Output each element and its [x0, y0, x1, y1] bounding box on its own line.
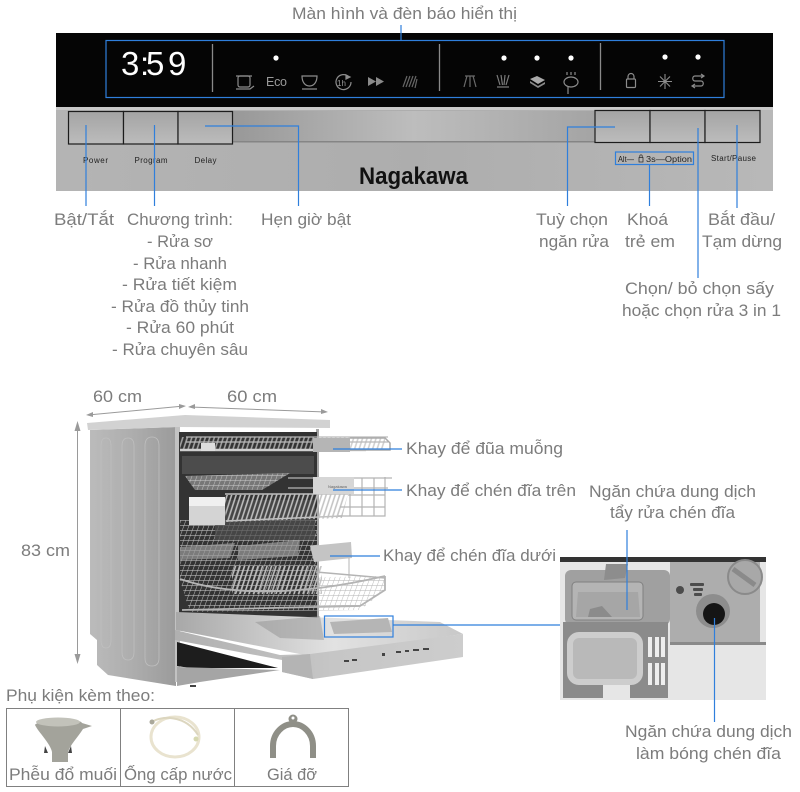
lock option label	[618, 154, 692, 164]
icon: pot	[236, 76, 254, 89]
label: rack option: Tuỳ chọn	[536, 210, 608, 229]
label: rinse aid compartment	[625, 722, 792, 763]
label: lower rack: Khay để chén đĩa dưới	[383, 546, 556, 565]
label: child lock: Khoá	[627, 210, 669, 229]
cutlery tray	[180, 437, 390, 452]
label: dry option: hoặc chọn rửa 3 in 1	[622, 301, 781, 320]
icon: jets	[497, 75, 509, 87]
icon: cycle	[692, 74, 704, 88]
left buttons	[68, 112, 232, 144]
photo background	[560, 557, 766, 700]
lock option label: Alt—	[618, 154, 634, 164]
table frame	[6, 708, 348, 786]
foot	[190, 685, 196, 687]
button label: Delay: Delay	[194, 156, 216, 165]
cabinet side	[90, 427, 176, 686]
dimension: depth	[86, 387, 186, 417]
label: dry option	[622, 279, 781, 320]
indicator dots	[273, 54, 701, 61]
detergent compartment	[572, 582, 643, 620]
label: rack option	[536, 210, 610, 251]
icon: spray	[464, 76, 476, 87]
icon: cup	[302, 76, 317, 89]
recessed button band	[232, 111, 596, 142]
rinse aid opening	[696, 594, 730, 628]
right unit	[670, 562, 760, 642]
control panel photo	[56, 33, 773, 191]
black display panel	[56, 33, 773, 108]
label: detergent compartment: tẩy rửa chén đĩa	[610, 503, 736, 522]
icon label: Eco: Eco	[266, 75, 287, 89]
label: child lock: trẻ em	[625, 232, 675, 251]
clock digits: 3:59	[121, 45, 186, 82]
label: power: Bật/Tắt	[54, 210, 114, 229]
open lid	[563, 622, 668, 698]
accessories table	[6, 708, 348, 786]
icon: dry	[403, 76, 417, 88]
label: program list: - Rửa đồ thủy tinh	[111, 297, 249, 316]
lid vents	[648, 637, 665, 685]
base below door	[177, 642, 278, 668]
label: start pause: Tạm dừng	[702, 232, 782, 251]
door inner surface	[176, 612, 463, 656]
rack tag	[310, 542, 352, 562]
left tray	[565, 570, 670, 625]
caption: bracket: Giá đỡ	[267, 765, 317, 784]
tub interior	[179, 432, 317, 622]
callout lines: control panel	[86, 25, 737, 278]
label: dry option: Chọn/ bỏ chọn sấy	[625, 279, 775, 298]
label: upper rack: Khay để chén đĩa trên	[406, 481, 576, 500]
icon: bracket	[273, 714, 313, 758]
caption: hose: Ống cấp nước	[124, 764, 232, 784]
caption: funnel: Phễu đổ muối	[9, 765, 117, 784]
icon: lock	[626, 74, 636, 88]
latch	[604, 564, 628, 580]
dimension: width: 60 cm	[227, 387, 277, 406]
icon: fast forward	[368, 77, 384, 86]
label: rinse aid compartment: Ngăn chứa dung dịch	[625, 722, 792, 741]
label: child lock	[625, 210, 675, 251]
detergent dispenser photo	[560, 557, 766, 700]
label: rinse aid compartment: làm bóng chén đĩa	[636, 744, 782, 763]
label: delay: Hẹn giờ bật	[261, 210, 351, 229]
lock option label: 3s—Option	[646, 154, 692, 164]
label: program list: - Rửa sơ	[147, 232, 213, 251]
dishwasher photo	[87, 415, 463, 687]
label: start pause: Bắt đầu/	[708, 210, 775, 229]
side embossed ribs	[101, 437, 159, 666]
upper rack	[185, 473, 392, 525]
brand name: Nagakawa	[359, 163, 469, 190]
label: program list: - Rửa nhanh	[133, 254, 227, 273]
silver lower panel	[56, 107, 773, 191]
icon: 1h: 1h	[337, 79, 346, 88]
label: program list: - Rửa chuyên sâu	[112, 340, 248, 359]
icon: funnel	[35, 718, 92, 762]
gasket	[570, 635, 640, 682]
icon: 1h	[336, 75, 351, 90]
button label: Program: Program	[134, 156, 168, 165]
front frame	[175, 427, 180, 682]
lower rack	[180, 540, 385, 626]
icon: hose	[150, 717, 199, 757]
label: rack option: ngăn rửa	[539, 232, 610, 251]
upper rack: Nagakawa	[328, 484, 348, 489]
icon: tablet	[530, 76, 545, 88]
button label: Power: Power	[83, 156, 108, 165]
dimension: height: 83 cm	[21, 541, 70, 560]
title: display label: Màn hình và đèn báo hiển thị	[292, 4, 517, 23]
dimension: depth: 60 cm	[93, 387, 142, 406]
callout lines: racks	[324, 449, 560, 637]
accessories heading: Phụ kiện kèm theo:	[6, 686, 155, 705]
label: detergent compartment: Ngăn chứa dung dịch	[589, 482, 756, 501]
callout lines: dispenser	[627, 530, 714, 722]
label: program list: Chương trình:	[127, 210, 233, 229]
label: program list: - Rửa 60 phút	[126, 318, 234, 337]
rack tag	[313, 477, 354, 494]
door front edge	[175, 630, 463, 679]
right buttons	[595, 110, 760, 142]
label: program list	[111, 210, 249, 359]
top cover	[87, 415, 330, 430]
dimension: width	[188, 387, 328, 414]
label: cutlery tray: Khay để đũa muỗng	[406, 439, 563, 458]
dimension: height	[21, 421, 80, 664]
separators	[212, 43, 600, 92]
icon: steam dish	[564, 72, 578, 94]
icon: sun	[658, 74, 672, 89]
label: start pause	[702, 210, 782, 251]
label: detergent compartment	[589, 482, 756, 522]
button label: Start/Pause: Start/Pause	[711, 154, 757, 163]
label: program list: - Rửa tiết kiệm	[122, 275, 237, 294]
cap	[728, 560, 762, 594]
door buttons	[344, 648, 429, 662]
vents	[676, 583, 704, 596]
